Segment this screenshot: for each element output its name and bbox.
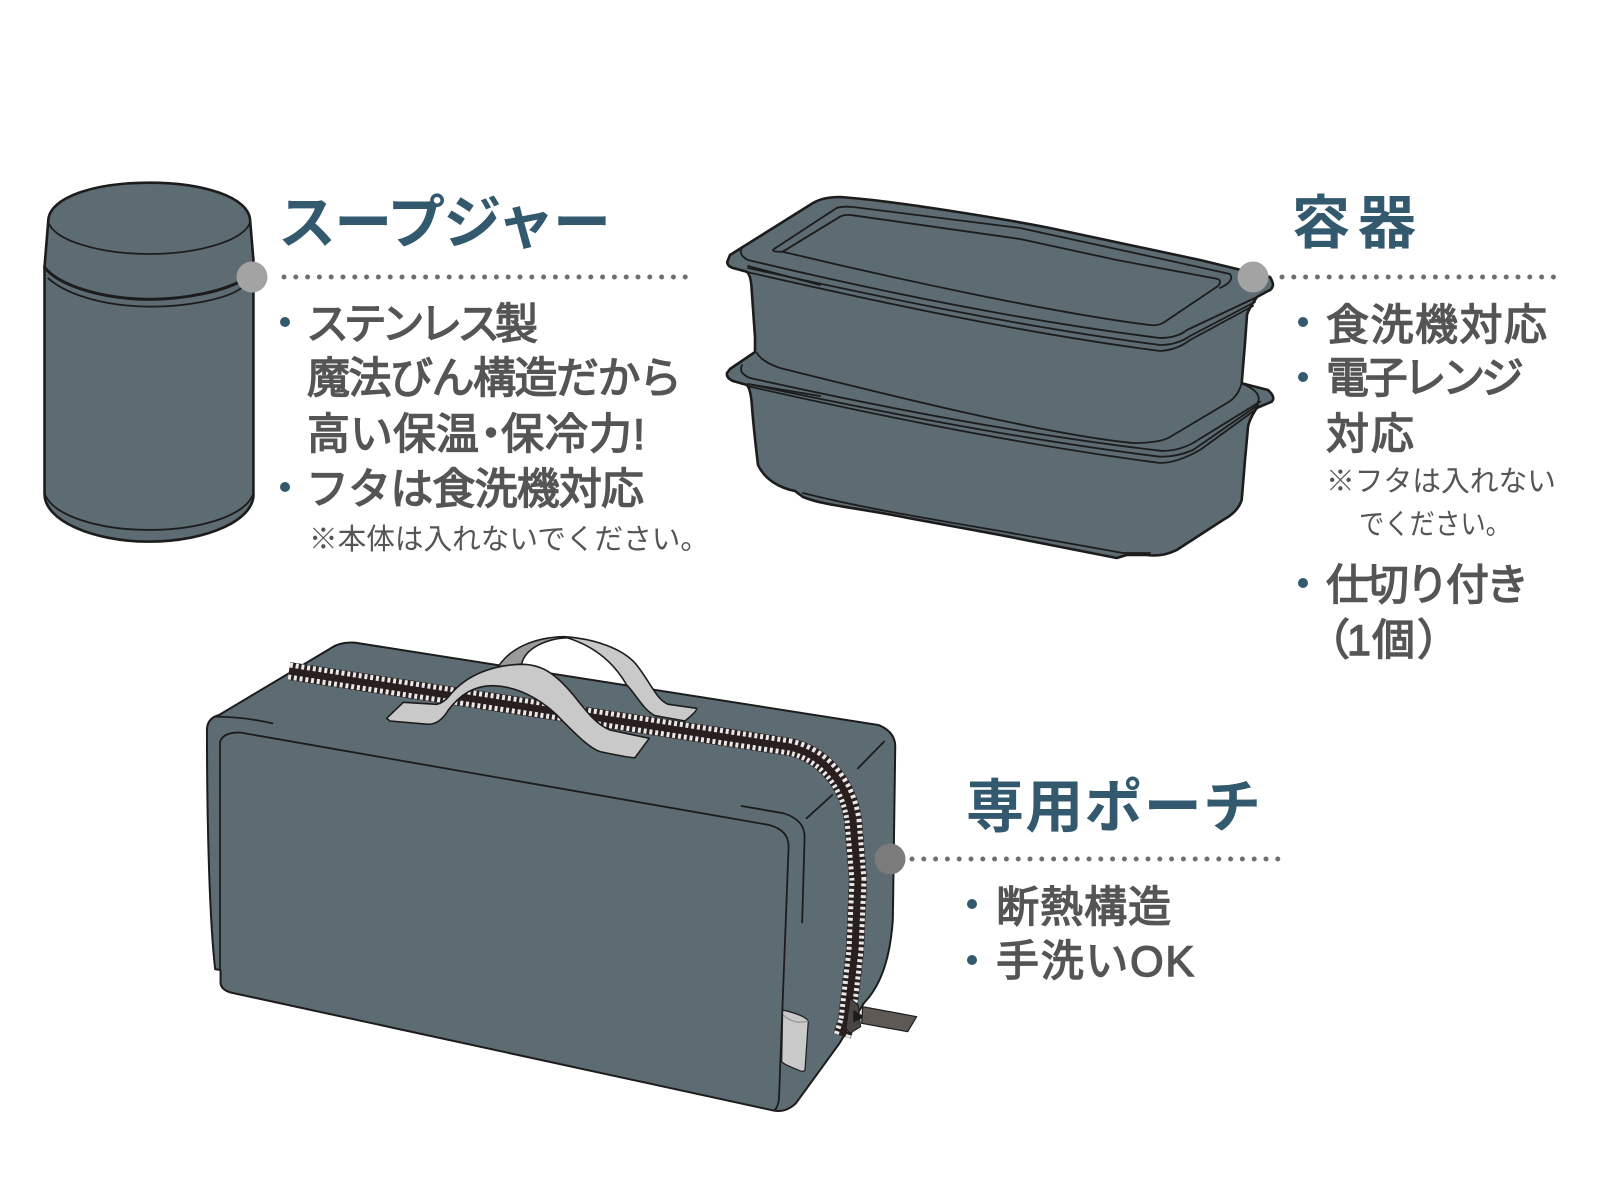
text block: soup jar features: 高い保温 bbox=[307, 411, 479, 459]
text block: container features: ※フタは入れない bbox=[1326, 466, 1556, 498]
text block: soup jar features: ※本体は入れないでください。 bbox=[309, 523, 709, 556]
callout marker: pouch bbox=[874, 844, 906, 874]
text block: container features: 食洗機対応 bbox=[1326, 302, 1547, 350]
text block: container features: 対応 bbox=[1326, 411, 1414, 459]
illustration: soup jar bbox=[45, 183, 253, 542]
text block: container features: でください。 bbox=[1359, 509, 1511, 541]
text block: container features: （1個） bbox=[1307, 617, 1460, 665]
handles bbox=[387, 637, 697, 758]
text block: soup jar features: ・ bbox=[470, 411, 512, 459]
text block: container features: 仕切り付き bbox=[1326, 562, 1529, 610]
dotted leader: container bbox=[1282, 274, 1560, 280]
callout marker: soup jar bbox=[236, 262, 268, 292]
text block: pouch features: 手洗いOK bbox=[996, 938, 1194, 986]
text block: soup jar features: ステンレス製 bbox=[306, 301, 538, 349]
text block: soup jar features: 保冷力! bbox=[501, 411, 645, 459]
side tag and zipper slider bbox=[782, 998, 862, 1071]
text block: container features: 電子レンジ bbox=[1326, 355, 1524, 403]
heading: soup jar: スープジャー bbox=[278, 191, 611, 256]
text block: pouch features: 断熱構造 bbox=[996, 884, 1171, 932]
text block: pouch features bbox=[967, 884, 1194, 986]
text block: soup jar features bbox=[280, 301, 709, 556]
dotted leader: soup jar bbox=[284, 274, 688, 280]
dotted leader: pouch bbox=[912, 856, 1280, 862]
zipper bbox=[289, 671, 858, 1036]
illustration: stacked food containers bbox=[727, 197, 1273, 558]
text block: soup jar features: フタは食洗機対応 bbox=[306, 466, 644, 514]
illustration: insulated pouch bbox=[207, 637, 917, 1111]
text block: soup jar features: 魔法びん構造だから bbox=[307, 355, 682, 403]
zipper pull strap bbox=[862, 1007, 917, 1032]
heading: container: 容器 bbox=[1292, 191, 1416, 256]
callout marker: container bbox=[1238, 262, 1268, 292]
pouch body bbox=[207, 643, 895, 1111]
text block: container features bbox=[1298, 302, 1556, 665]
heading: pouch: 専用ポーチ bbox=[966, 775, 1261, 840]
